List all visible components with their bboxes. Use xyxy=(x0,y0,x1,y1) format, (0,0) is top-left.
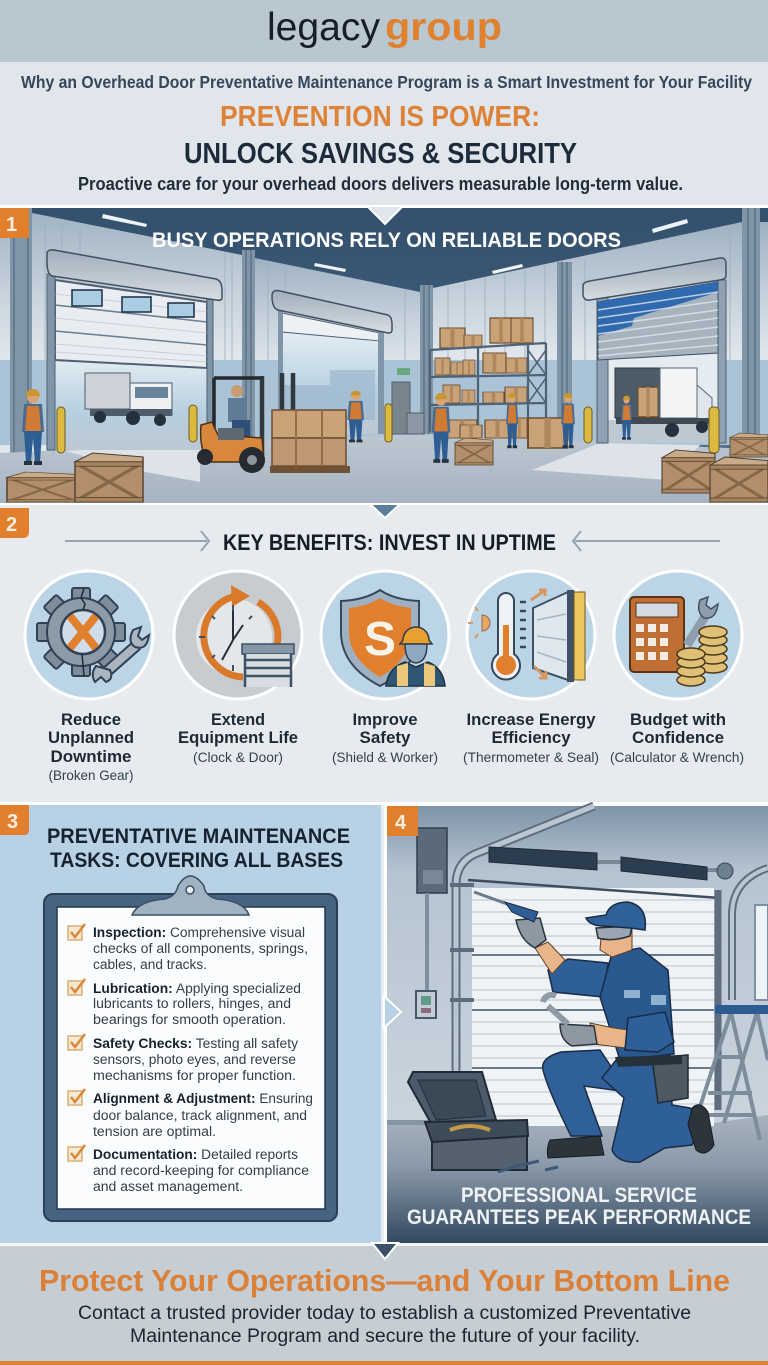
heading: unlock savings: UNLOCK SAVINGS & SECURITY xyxy=(184,138,577,170)
task: inspection: cables, and tracks. xyxy=(93,957,207,972)
right arrow xyxy=(573,531,720,551)
bottom accent bar xyxy=(0,1361,768,1365)
tagline: Proactive care for your overhead doors delivers measurable long-term value. xyxy=(78,174,683,194)
label: (Broken Gear) xyxy=(48,767,134,783)
tool pouch xyxy=(652,1055,688,1103)
label: Efficiency xyxy=(492,728,571,747)
panel 2: key benefits xyxy=(0,504,768,802)
right door frame xyxy=(597,280,726,443)
task: safety checks xyxy=(68,1034,298,1083)
benefit 1: reduce downtime xyxy=(25,571,153,783)
floor highlights xyxy=(65,442,700,482)
icon: broken gear xyxy=(37,588,149,682)
back boot xyxy=(688,1105,714,1153)
forklift xyxy=(197,373,293,473)
icon: thermometer and seal xyxy=(468,590,585,682)
crate centre xyxy=(455,425,493,465)
goggles xyxy=(596,926,632,940)
window right xyxy=(755,905,768,1000)
label: Budget with xyxy=(630,710,726,729)
icon: shield and worker xyxy=(341,590,445,686)
raised forearm xyxy=(535,942,565,974)
label: (Clock & Door) xyxy=(193,749,283,765)
logo: group: group xyxy=(385,6,502,49)
back wall xyxy=(255,258,420,440)
badge 3 xyxy=(0,805,29,835)
label: Reduce xyxy=(61,710,121,729)
task: documentation: and asset management. xyxy=(93,1179,243,1194)
task: lubrication xyxy=(68,979,301,1027)
floor xyxy=(0,434,768,503)
lower glove xyxy=(560,1024,597,1046)
middle door frame xyxy=(278,310,384,434)
label: Confidence xyxy=(632,728,724,747)
back leg xyxy=(543,1050,628,1136)
crates left xyxy=(7,453,143,502)
panel 1 title: BUSY OPERATIONS RELY ON RELIABLE DOORS xyxy=(152,228,621,252)
front leg xyxy=(602,1055,705,1162)
control box xyxy=(417,828,447,990)
task: lubrication: Lubrication: Applying specialized xyxy=(93,981,301,996)
left truck xyxy=(85,373,172,426)
badge 4 xyxy=(387,806,418,836)
torso xyxy=(600,948,674,1060)
step ladder xyxy=(694,1007,768,1140)
icon: calculator, wrench and coins xyxy=(630,597,727,686)
task: safety checks: mechanisms for proper function. xyxy=(93,1068,296,1083)
clip xyxy=(132,876,249,915)
header logo band xyxy=(0,0,768,62)
grease tool xyxy=(474,892,510,905)
heading: KEY BENEFITS: INVEST IN UPTIME xyxy=(223,530,556,555)
face xyxy=(600,926,632,957)
left door hood xyxy=(47,250,222,300)
label xyxy=(48,710,134,783)
benefit 4: energy efficiency xyxy=(463,571,599,765)
heading: prevention is power: PREVENTION IS POWER: xyxy=(220,101,540,133)
middle door opening xyxy=(282,332,380,434)
exit door and sign xyxy=(392,368,410,434)
crates right xyxy=(662,433,768,502)
badge 4: 4 xyxy=(395,812,407,834)
benefit 3: improve safety xyxy=(321,571,449,765)
task: alignment xyxy=(68,1089,313,1139)
label: Downtime xyxy=(50,747,132,766)
clipboard xyxy=(44,876,337,1221)
task: lubrication: bearings for smooth operation. xyxy=(93,1012,286,1027)
hand wrench xyxy=(548,1006,568,1024)
badge 2 xyxy=(0,508,29,538)
label: (Calculator & Wrench) xyxy=(610,749,744,765)
workers xyxy=(22,389,632,465)
icon: shield and worker: S xyxy=(364,613,396,666)
benefit 5: budget with confidence xyxy=(610,571,744,765)
label: Increase Energy xyxy=(466,710,596,729)
label: Equipment Life xyxy=(178,728,298,747)
bin xyxy=(407,413,424,434)
label xyxy=(610,710,744,765)
structural columns xyxy=(10,208,760,453)
task: documentation xyxy=(68,1145,309,1194)
task: safety checks: Safety Checks: Testing all safety xyxy=(93,1036,298,1051)
logo: legacy: legacy xyxy=(267,6,381,49)
task: lubrication: lubricants to rollers, hinges, and xyxy=(93,996,291,1011)
tracks xyxy=(450,806,768,1110)
forklift driver xyxy=(228,385,250,440)
distant buildings xyxy=(282,370,375,420)
notch between intro and panel 1 xyxy=(367,206,403,224)
badge 1: 1 xyxy=(6,214,17,236)
task: safety checks: sensors, photo eyes, and reverse xyxy=(93,1052,296,1067)
task: alignment: Alignment & Adjustment: Ensuring xyxy=(93,1091,313,1106)
task: inspection xyxy=(68,924,308,972)
label: (Thermometer & Seal) xyxy=(463,749,599,765)
label: Improve xyxy=(352,710,418,729)
task: documentation: Documentation: Detailed reports xyxy=(93,1147,298,1162)
panel 4 caption: PROFESSIONAL SERVICE xyxy=(461,1184,697,1207)
panel 1: warehouse illustration xyxy=(0,205,768,505)
floor xyxy=(387,1115,768,1243)
right wall xyxy=(433,222,768,445)
panel 4: technician illustration xyxy=(384,805,768,1244)
middle rollup door xyxy=(282,313,380,341)
technician xyxy=(474,892,714,1162)
icon: clock and door xyxy=(196,585,294,687)
lower arm skin xyxy=(590,1023,628,1048)
footer text: Maintenance Program and secure the future of your facility. xyxy=(130,1326,640,1347)
garage door xyxy=(468,880,720,1126)
belt xyxy=(615,1055,682,1067)
label: Safety xyxy=(360,728,411,747)
notch xyxy=(372,1243,398,1259)
label: (Shield & Worker) xyxy=(332,749,438,765)
footer text: Contact a trusted provider today to establish a customized Preventative xyxy=(78,1303,691,1324)
toolbox xyxy=(408,1072,528,1170)
clip hole xyxy=(186,886,194,894)
wall keypad xyxy=(416,991,436,1018)
right rollup door xyxy=(598,282,718,360)
task: inspection: checks of all components, springs, xyxy=(93,941,308,956)
right door opening xyxy=(608,355,718,443)
shirt patches xyxy=(624,990,666,1005)
torsion springs xyxy=(489,847,733,880)
badge 2: 2 xyxy=(6,514,17,536)
left arrow xyxy=(65,531,209,551)
right delivery truck xyxy=(615,368,712,437)
heading xyxy=(47,824,350,872)
label: Unplanned xyxy=(48,728,134,747)
pallet of boxes xyxy=(270,410,350,473)
label xyxy=(178,710,298,765)
lower wall band xyxy=(0,360,768,445)
pallet of boxes right xyxy=(528,418,567,448)
label xyxy=(332,710,438,765)
task: documentation: and record-keeping for compliance xyxy=(93,1163,309,1178)
cap xyxy=(586,902,645,930)
heading: PREVENTATIVE MAINTENANCE xyxy=(47,824,350,848)
panel 4 caption xyxy=(407,1184,751,1229)
floor in right opening xyxy=(608,420,718,443)
heading: TASKS: COVERING ALL BASES xyxy=(50,848,343,872)
left sectional door xyxy=(55,280,207,368)
benefit 2: extend equipment life xyxy=(174,571,302,765)
notch xyxy=(370,504,400,518)
label: Extend xyxy=(211,710,265,729)
door frame left xyxy=(47,274,213,450)
raised sleeve xyxy=(548,959,608,997)
notch between panels 3 and 4 xyxy=(384,996,401,1028)
panel 3: maintenance tasks xyxy=(0,802,768,1243)
footer headline: Protect Your Operations—and Your Bottom Line xyxy=(39,1263,730,1298)
screwdrivers on floor xyxy=(498,1161,558,1172)
middle door hood xyxy=(272,291,392,333)
ceiling lights xyxy=(102,214,688,274)
baseboard xyxy=(387,1120,472,1125)
right door hood xyxy=(583,258,726,300)
task: inspection: Inspection: Comprehensive visual xyxy=(93,925,305,940)
lower sleeve xyxy=(625,1012,674,1052)
yellow bollards xyxy=(57,404,719,453)
footer call to action xyxy=(0,1243,768,1365)
task: alignment: tension are optimal. xyxy=(93,1124,216,1139)
front boot xyxy=(547,1136,604,1158)
wall ribs xyxy=(45,220,730,360)
upper glove xyxy=(516,918,546,948)
badge 3: 3 xyxy=(7,811,18,833)
shelving with boxes xyxy=(430,318,546,438)
intro text block xyxy=(0,62,768,205)
left door opening xyxy=(55,358,208,450)
label xyxy=(463,710,599,765)
left side wall xyxy=(0,208,242,455)
badge 1 xyxy=(0,208,29,238)
task: alignment: door balance, track alignment, and xyxy=(93,1108,307,1123)
footer text xyxy=(78,1303,691,1347)
